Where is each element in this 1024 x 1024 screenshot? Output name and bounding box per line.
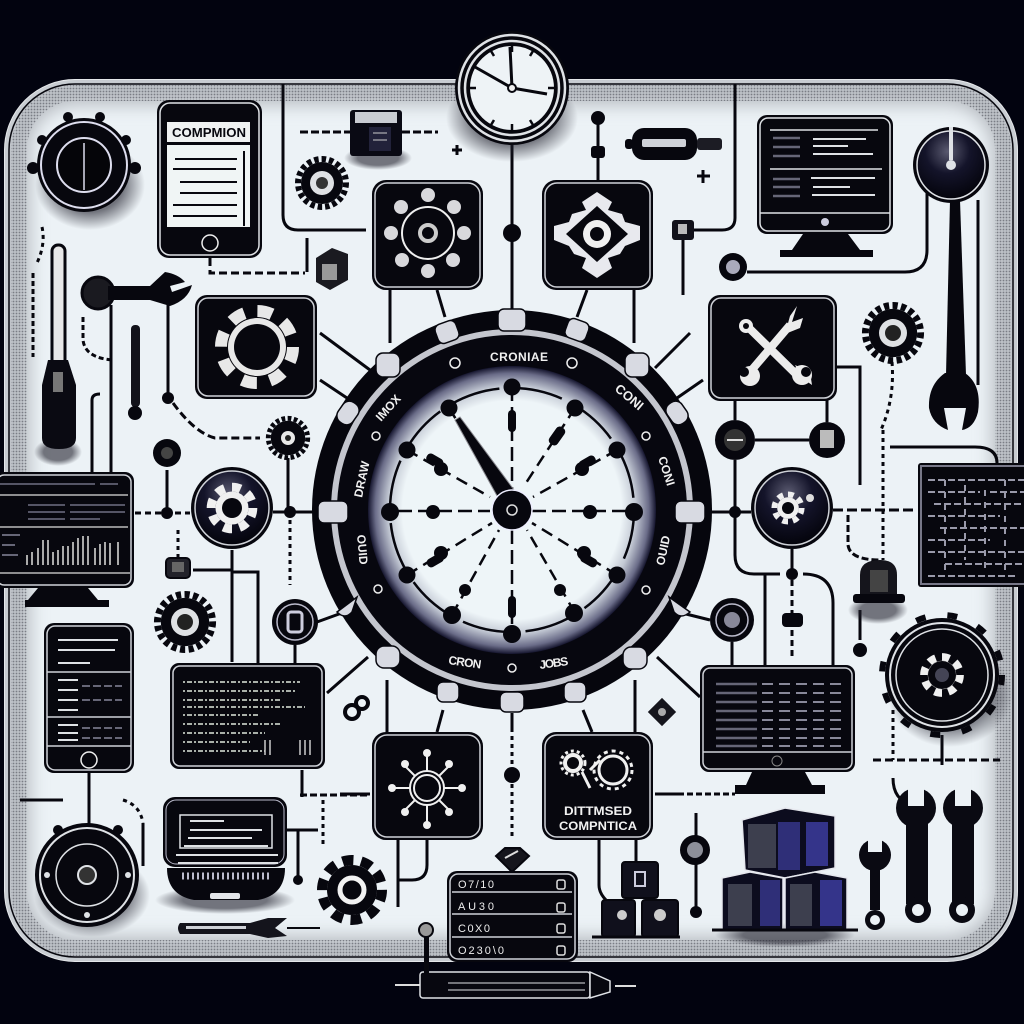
icon: ring node small left <box>153 439 181 467</box>
dial face <box>368 366 656 654</box>
icon: stacked boxes small <box>592 862 680 937</box>
list panel: C0X0 <box>458 923 490 935</box>
central dial <box>312 309 712 712</box>
dial label right: CONI <box>612 381 647 413</box>
hub <box>492 490 532 530</box>
wrench medium <box>896 786 936 923</box>
icon: gear bottom-left <box>157 594 213 650</box>
clock: top <box>446 31 578 162</box>
wrench small <box>859 837 891 930</box>
dial label far right: CONI <box>655 455 678 487</box>
dial label bottom left: CRON <box>448 653 482 672</box>
icon: ball gear right <box>751 467 833 549</box>
dial label lower left: OUID <box>354 534 371 565</box>
icon: cube left <box>316 248 348 290</box>
clock hand <box>455 417 520 512</box>
icon: ball gear left <box>191 467 273 549</box>
list panel: O7/10 <box>458 879 494 891</box>
icon: stacked boxes large <box>712 808 858 947</box>
monitor: lower right <box>700 665 855 794</box>
panel: distributed computing icon: DITTMSED <box>564 804 632 818</box>
wrench large <box>943 786 983 923</box>
monitor: top right <box>757 115 893 257</box>
tablet left lower <box>44 623 134 773</box>
icon: connector block top <box>344 110 412 170</box>
monitor: left edge chart <box>0 472 134 607</box>
icon: pill on line <box>782 613 803 627</box>
outer black ring <box>312 310 712 710</box>
panel: puzzle-gear icon <box>542 180 653 290</box>
dial label far left: DRAW <box>351 459 373 499</box>
icon: screwdriver <box>34 245 82 466</box>
icon: wrench and ball top right <box>913 127 989 430</box>
panel: gear-network icon <box>372 180 483 290</box>
icon: cube top-right <box>672 220 694 240</box>
phone: top left: COMPMION <box>172 125 246 140</box>
icon: pendant marks <box>128 111 867 918</box>
terminal panel <box>170 663 325 769</box>
icon: cylinder top right <box>625 128 722 160</box>
panel: distributed computing icon <box>542 732 653 840</box>
icon: small plus marks <box>452 145 710 183</box>
spokes <box>390 387 634 634</box>
icon: dial lower left <box>34 823 150 937</box>
monitor: right edge grid <box>918 463 1024 587</box>
pen: bottom <box>419 923 610 998</box>
small icon: lower right of dial <box>648 698 676 726</box>
silver ring <box>334 332 690 688</box>
icon: small cube left <box>166 558 190 578</box>
dial label left: IMOX <box>373 392 404 424</box>
list panel <box>447 871 578 962</box>
ring tabs <box>318 309 705 712</box>
icon: node on line <box>680 835 710 865</box>
list panel: AU30 <box>458 901 494 913</box>
icon: printer right <box>848 560 908 624</box>
panel: network icon bottom <box>372 732 483 840</box>
dial label top: CRONIAE <box>490 350 548 364</box>
icon: small cog right <box>865 305 921 361</box>
list panel: O230\0 <box>458 945 504 957</box>
icon: small cog left <box>268 418 308 458</box>
dial nodes <box>381 378 643 643</box>
icon: bottom gear <box>322 860 382 920</box>
phone: top left <box>157 100 262 258</box>
icon: wrench left <box>82 272 192 309</box>
dial label bottom right: JOBS <box>538 654 569 672</box>
icon: laptop lower left <box>155 797 295 914</box>
panel: gear icon left <box>195 295 317 399</box>
icon: wrench bottom <box>178 918 287 938</box>
icon: dial top left <box>27 112 145 230</box>
icon: node markers <box>715 253 845 460</box>
dial label lower right: OUID <box>653 534 673 567</box>
ring markers <box>372 358 650 672</box>
panel: distributed computing icon: COMPNTICA <box>559 819 637 833</box>
icon: ring node left <box>272 599 318 645</box>
panel: tools icon right <box>708 295 837 401</box>
icon: diamond <box>496 848 529 872</box>
icon: wrenches bottom right <box>859 786 983 930</box>
icon: small cog top <box>298 159 346 207</box>
large dial right <box>882 615 1012 747</box>
small icon: lower left of dial <box>345 697 368 719</box>
icon: small driver <box>131 325 140 407</box>
icon: ring node right <box>710 598 754 642</box>
